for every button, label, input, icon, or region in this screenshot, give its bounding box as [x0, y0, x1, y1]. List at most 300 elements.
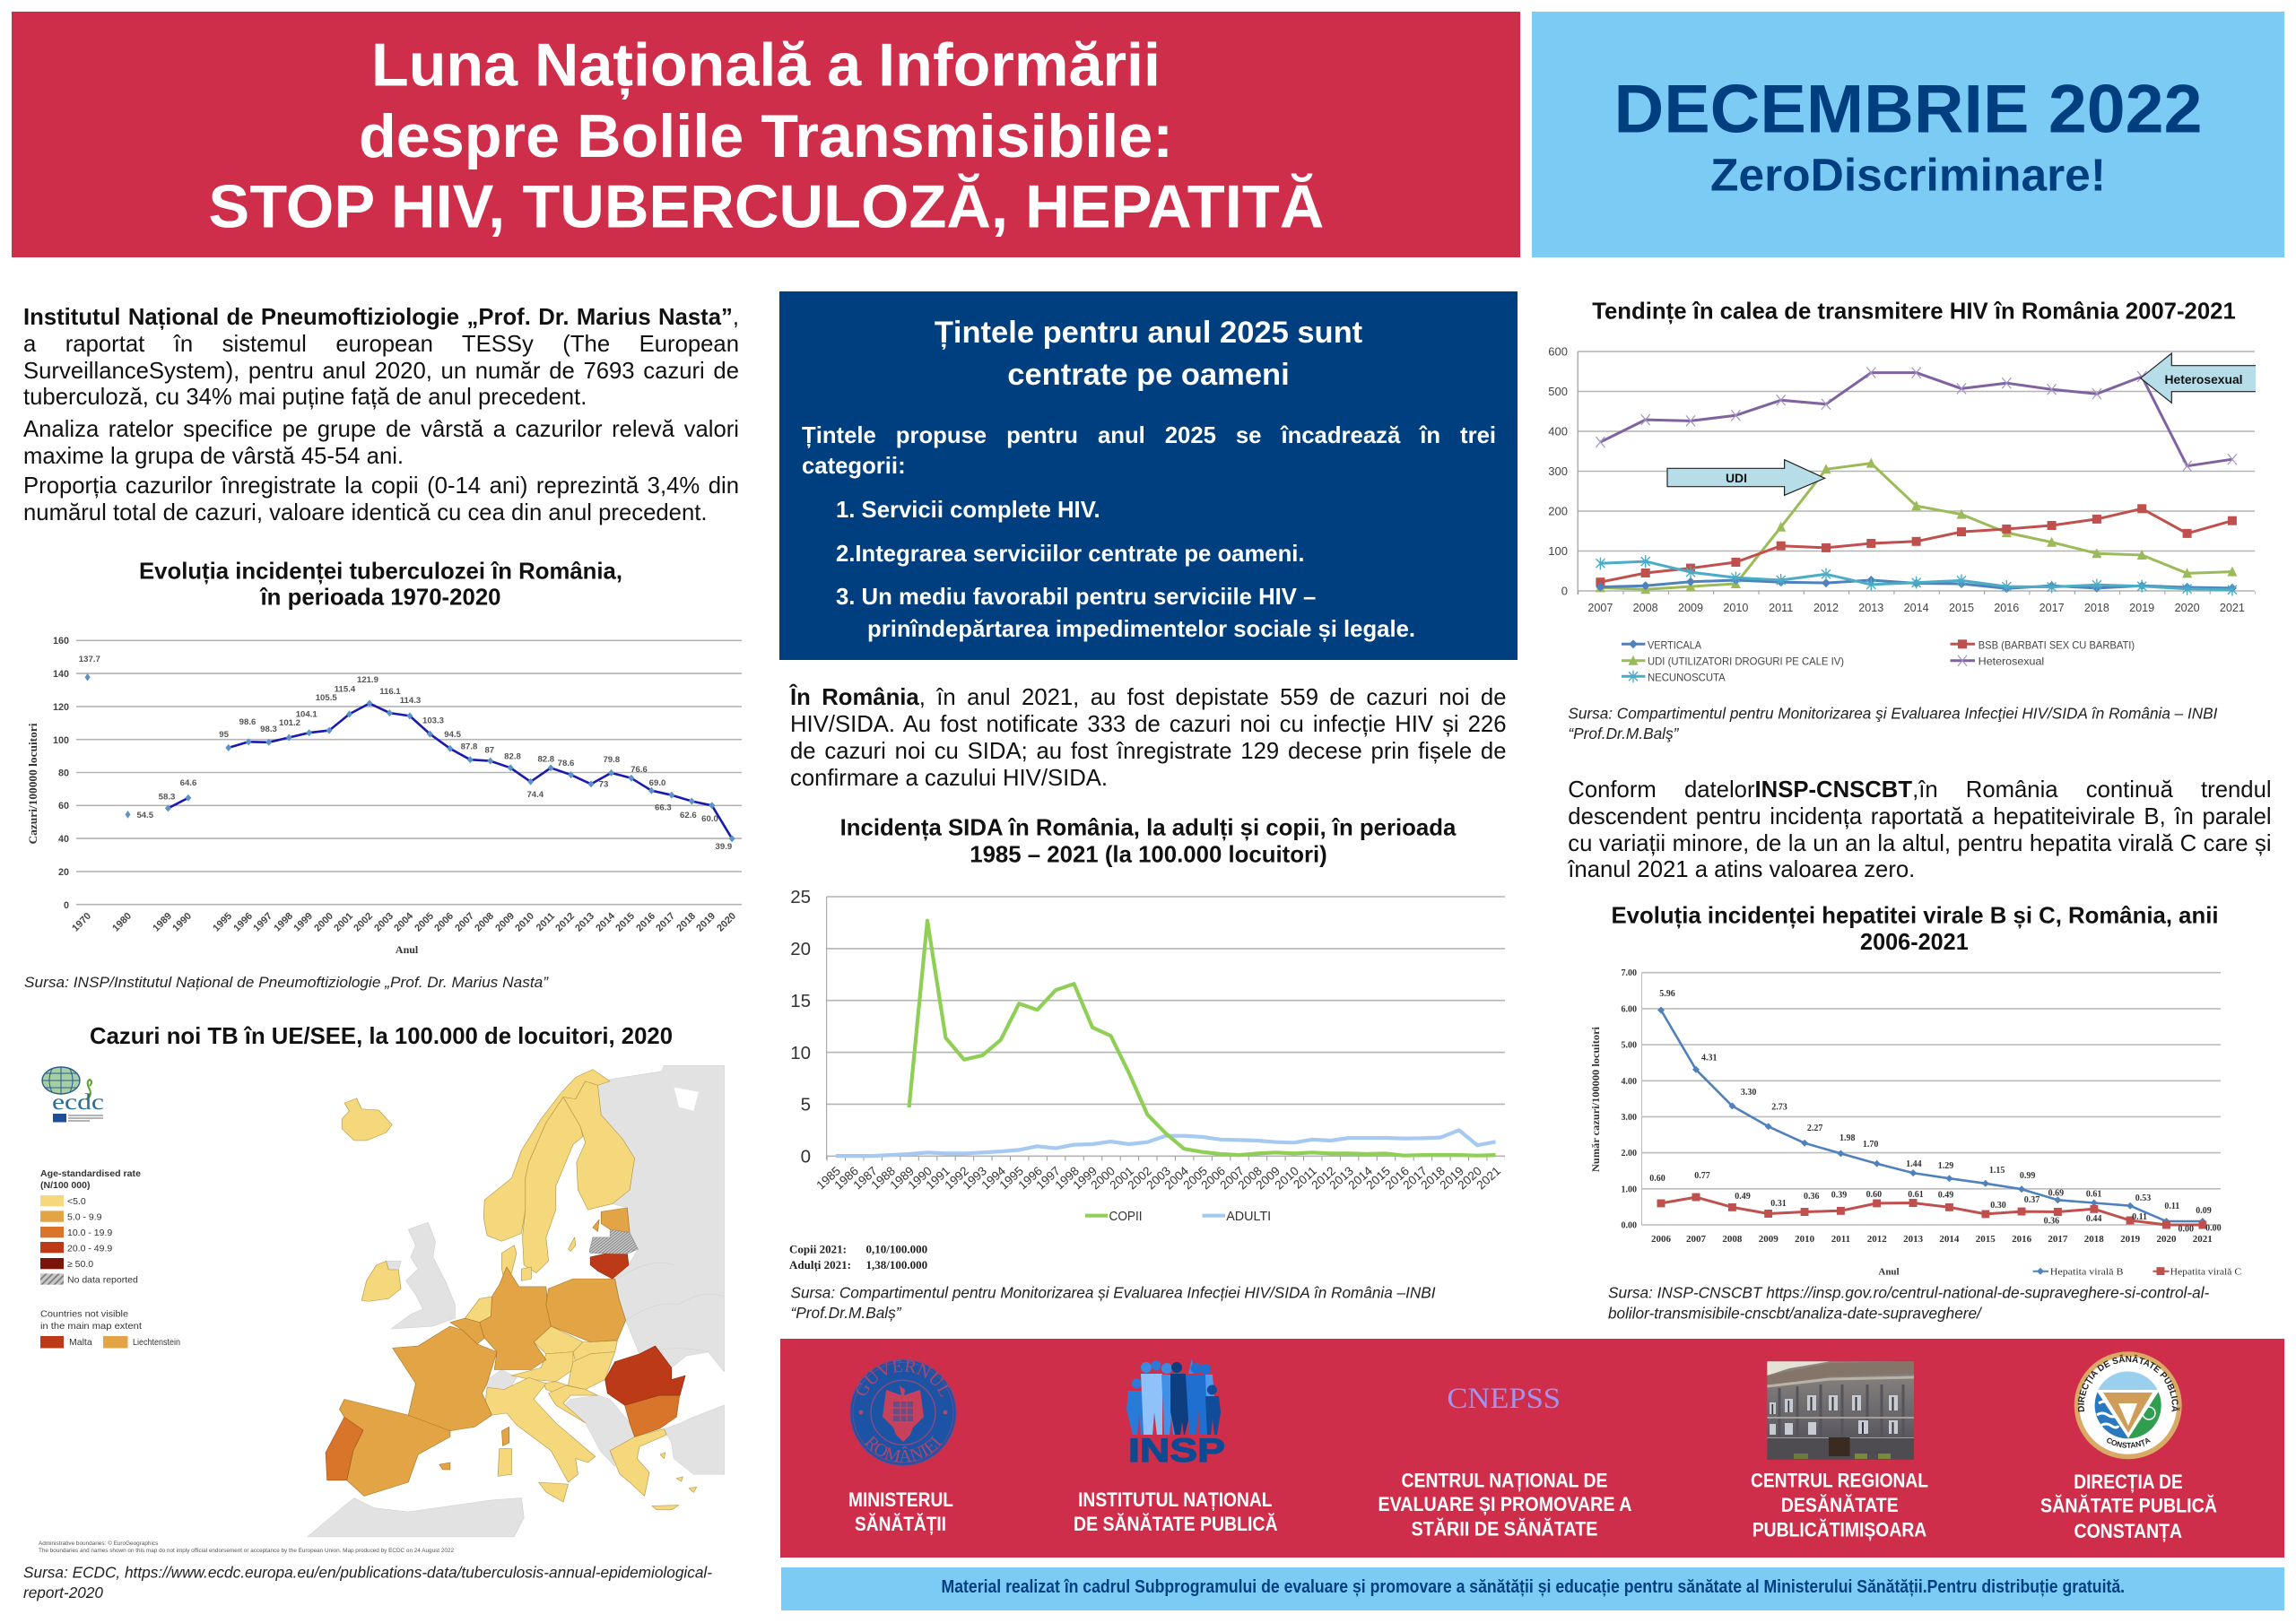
map legend: [40, 1168, 180, 1349]
data labels: 1.44: [1906, 1159, 1922, 1169]
data labels: 1.98: [1839, 1133, 1856, 1143]
x axis years: 2009: [1759, 1234, 1779, 1245]
label: Direcția de Sănătate Publică Constanța: [2040, 1471, 2217, 1542]
text block: age groups: [23, 416, 739, 468]
x axis years: 2018: [1418, 1164, 1448, 1192]
text block: HIV in Romania: de cazuri noi cu SIDA; au fost înregistrate 129 decese prin fișele de: [790, 739, 1507, 764]
series: hepatitis C: [1661, 1197, 2203, 1225]
title banner: [12, 12, 1520, 257]
x axis years: 2017: [2039, 602, 2065, 614]
x axis years: 2002: [352, 911, 375, 933]
source note: [791, 1284, 1436, 1322]
x axis years: 2012: [553, 911, 577, 933]
footer note strip: Material realizat în cadrul Subprogramului de evaluare și promovare a sănătății și educație pentru sănătate al Ministerului Sănătății.Pentru distribuție gratuită.: [942, 1577, 2125, 1597]
x axis years: 1980: [110, 911, 134, 933]
x axis years: 2006: [1651, 1234, 1672, 1245]
x axis years: 2015: [613, 911, 637, 933]
data labels: [1649, 989, 2222, 1234]
x axis years: 2018: [674, 911, 698, 933]
map legend: <5.0: [67, 1196, 86, 1207]
data labels: 0.49: [1735, 1192, 1751, 1202]
source note: Sursa: Compartimentul pentru Monitorizarea şi Evaluarea Infecţiei HIV/SIDA în România – INBI: [1568, 705, 2218, 723]
chart title: HIV: Tendințe în calea de transmitere HIV în România 2007-2021: [1592, 299, 2236, 325]
text block: HIV in Romania: [789, 683, 1507, 791]
label: Ministerul Sănătății: SĂNĂTĂȚII: [855, 1513, 946, 1535]
x axis years: 2002: [1125, 1164, 1154, 1192]
logo: ecdc: [42, 1067, 104, 1123]
chart legend: [2033, 1266, 2241, 1277]
intro line: Țintele propuse pentru anul 2025 se încadrează în trei: [802, 423, 1496, 448]
x axis years: 2017: [654, 911, 677, 933]
label: Ministerul Sănătății: MINISTERUL: [848, 1488, 953, 1511]
y axis values: [790, 887, 811, 1167]
x axis years: 2010: [1723, 602, 1748, 614]
y axis values: 20: [58, 867, 69, 878]
x axis years: [1651, 1234, 2213, 1245]
x axis years: 2006: [1198, 1164, 1228, 1192]
data labels: 87.8: [461, 742, 478, 751]
x axis years: 2020: [2175, 602, 2200, 614]
x axis years: 1995: [211, 911, 234, 933]
y axis values: 4.00: [1622, 1077, 1637, 1087]
title banner: Luna Națională a Informării: [371, 31, 1161, 100]
y axis values: 600: [1548, 344, 1568, 359]
logo: Government of Romania seal: GUVERNUL: [856, 1359, 949, 1397]
x axis years: 2009: [1253, 1164, 1283, 1192]
map disclaimer: [39, 1540, 454, 1554]
label: Direcția de Sănătate Publică Constanța: DIRECȚIA DE: [2074, 1471, 2183, 1493]
x axis years: 1990: [170, 911, 194, 933]
label: Direcția de Sănătate Publică Constanța: SĂNĂTATE PUBLICĂ: [2040, 1495, 2217, 1517]
y axis values: 7.00: [1622, 968, 1637, 978]
y axis values: 2.00: [1622, 1149, 1637, 1159]
x axis years: 2020: [2156, 1234, 2177, 1245]
x axis years: 1998: [1052, 1164, 1082, 1192]
x axis years: 2004: [392, 910, 416, 933]
map legend: Malta: [69, 1337, 92, 1348]
line chart: hepatitis B and C incidence: [1591, 903, 2241, 1323]
x axis years: 2004: [1161, 1164, 1191, 1192]
y axis values: 160: [53, 636, 69, 647]
source note: [1568, 705, 2218, 742]
chart title: AIDS: 1985 – 2021 (la 100.000 locuitori): [970, 843, 1327, 868]
source note: “Prof.Dr.M.Balș”: [791, 1304, 902, 1322]
chart title: tuberculosis: Evoluția incidenței tuberculozei în România,: [139, 560, 622, 585]
y axis values: 0: [1561, 585, 1568, 597]
data labels: 0.61: [1908, 1190, 1924, 1200]
text block: tuberculosis cases: Institutul Național de Pneumoftiziologie „Prof. Dr. Marius Nasta”,: [23, 305, 739, 330]
data labels: 121.9: [357, 675, 378, 685]
countries 5.0 to 9.9: [339, 1208, 630, 1496]
logo: INSP: INSP: [1128, 1432, 1225, 1469]
date banner: ZeroDiscriminare!: [1710, 149, 2106, 200]
x axis years: 1988: [868, 1164, 898, 1192]
y axis values: [53, 636, 69, 911]
arrow: UDI: [1667, 460, 1825, 495]
data labels: 82.8: [537, 755, 555, 764]
data labels: 95: [219, 730, 230, 740]
countries under 5 per 100 000: [342, 1070, 697, 1510]
chart legend: COPII: [1109, 1210, 1143, 1224]
y axis values: 5.00: [1622, 1040, 1637, 1051]
text block: hepatitis trend: descendent pentru incidența raportată a hepatiteivirale B, în paralel: [1568, 804, 2272, 829]
x axis years: 1990: [905, 1164, 935, 1192]
x axis years: 2011: [1831, 1234, 1850, 1245]
data labels: 39.9: [716, 842, 732, 852]
data labels: 0.49: [1938, 1191, 1953, 1200]
x axis years: 2014: [1939, 1234, 1960, 1245]
y axis values: 10: [790, 1043, 811, 1063]
data labels: 0.77: [1694, 1171, 1710, 1181]
arrow: UDI: UDI: [1726, 471, 1747, 485]
y axis values: 60: [58, 801, 69, 812]
data labels: 0.09: [2196, 1206, 2212, 1216]
chart legend: Heterosexual: [1979, 655, 2044, 668]
2021 rates note: Copii 2021:: [789, 1243, 847, 1256]
x axis years: 2007: [1686, 1234, 1706, 1245]
text block: hepatitis trend: [1568, 777, 2272, 882]
title banner: STOP HIV, TUBERCULOZĂ, HEPATITĂ: [208, 173, 1324, 241]
map legend: ≥ 50.0: [67, 1259, 93, 1270]
data labels: 98.3: [260, 725, 277, 734]
chart legend: VERTICALA: [1648, 638, 1701, 651]
x axis years: 2007: [1587, 602, 1613, 614]
x axis years: 1989: [887, 1164, 917, 1192]
x axis years: 1993: [960, 1164, 989, 1192]
text block: HIV in Romania: În România, în anul 2021, au fost depistate 559 de cazuri noi de: [790, 685, 1507, 710]
data labels: 1.29: [1938, 1161, 1953, 1171]
label: Centrul Regional: [1751, 1469, 1928, 1541]
x axis years: 2020: [715, 911, 738, 933]
y axis values: 500: [1548, 385, 1568, 398]
x axis years: 2008: [1633, 602, 1658, 614]
x axis title: Anul: [1878, 1266, 1900, 1277]
logo: Government of Romania seal: ROMÂNIEI: [865, 1435, 942, 1462]
map heading: Cazuri noi TB în UE/SEE, la 100.000 de locuitori, 2020: [90, 1024, 673, 1049]
y axis values: [1548, 344, 1568, 597]
data labels: 69.0: [649, 778, 665, 788]
text block: HIV in Romania: HIV/SIDA. Au fost notificate 333 de cazuri noi cu infecție HIV și 226: [790, 712, 1507, 737]
series: verticala: [1600, 580, 2232, 588]
countries 10.0 to 19.9: [326, 1393, 680, 1480]
x axis years: 2016: [634, 911, 657, 933]
data labels: 103.3: [422, 716, 444, 726]
logo: INSP: [1126, 1358, 1225, 1469]
x axis years: 2007: [1217, 1164, 1247, 1192]
label: Institutul Național de Sănătate Publică: [1074, 1488, 1278, 1535]
data labels: 60.0: [701, 814, 718, 824]
x axis years: 1995: [996, 1164, 1026, 1192]
x axis years: 2014: [1904, 602, 1929, 614]
x axis years: 2016: [1994, 602, 2019, 614]
text block: tuberculosis cases: [23, 305, 739, 410]
series: incidence line: [168, 703, 732, 838]
data labels: 0.36: [1804, 1192, 1820, 1202]
x axis years: 2000: [312, 911, 335, 933]
x axis years: 1997: [1033, 1164, 1063, 1192]
map legend: 10.0 - 19.9: [67, 1228, 112, 1238]
data labels: 0.00: [2178, 1225, 2194, 1234]
y axis values: 400: [1548, 425, 1568, 438]
data labels: 0.39: [1831, 1191, 1847, 1200]
data labels: 0.00: [2205, 1223, 2222, 1234]
x axis years: 2003: [372, 911, 396, 933]
series: necunoscuta: [1600, 561, 2232, 590]
arrow: Heterosexual: Heterosexual: [2165, 372, 2242, 386]
2021 rates note: [789, 1243, 927, 1272]
x axis years: 2009: [1678, 602, 1703, 614]
y axis values: 0: [801, 1146, 811, 1167]
x axis years: 2011: [535, 911, 557, 933]
chart legend: Hepatita virală C: [2170, 1266, 2241, 1277]
x axis years: 2001: [332, 911, 355, 933]
map legend: Countries not visible: [40, 1309, 128, 1320]
y axis title: Număr cazuri/100000 locuitori: [1591, 1026, 1602, 1172]
series: hepatitis B: [1661, 1010, 2203, 1221]
x axis years: 1999: [291, 911, 315, 933]
y axis values: [1622, 968, 1637, 1230]
data labels: 54.5: [136, 811, 154, 820]
panel heading: Țintele pentru anul 2025 sunt: [935, 316, 1362, 350]
data labels: [79, 655, 732, 852]
x axis years: 2012: [1813, 602, 1839, 614]
x axis years: 1998: [272, 911, 295, 933]
text block: children proportion: numărul total de cazuri, valoare identică cu cea din anul precedent.: [23, 500, 708, 525]
logo: Direcția de Sănătate Publică Constanța seal: DIRECȚIA DE SĂNĂTATE PUBLICĂ: [2077, 1354, 2180, 1411]
y axis values: 25: [790, 887, 811, 907]
y axis values: 100: [53, 735, 69, 746]
x axis years: 2008: [1722, 1234, 1743, 1245]
data labels: 78.6: [558, 759, 574, 768]
line chart: tuberculosis incidence 1970-2020: [24, 560, 742, 991]
date banner: [1532, 12, 2284, 257]
x axis years: 2019: [2120, 1234, 2141, 1245]
source note: Sursa: INSP-CNSCBT https://insp.gov.ro/centrul-national-de-supraveghere-si-control-al-: [1608, 1284, 2209, 1302]
no data: Latvia: [589, 1229, 638, 1254]
logo text: CNEPSS: CNEPSS: [1447, 1383, 1561, 1415]
chart legend: UDI (UTILIZATORI DROGURI PE CALE IV): [1648, 655, 1844, 668]
x axis years: 2001: [1107, 1164, 1136, 1192]
data labels: 58.3: [159, 793, 175, 802]
data labels: 79.8: [603, 755, 621, 765]
y axis values: 6.00: [1622, 1004, 1637, 1015]
x axis years: 2011: [1769, 602, 1793, 614]
date banner: DECEMBRIE 2022: [1614, 71, 2203, 147]
series: heterosexual: [1600, 373, 2232, 466]
chart title: hepatitis: 2006-2021: [1860, 930, 1969, 955]
x axis years: 2012: [1867, 1234, 1887, 1245]
data labels: 82.8: [504, 751, 521, 762]
data labels: 98.6: [239, 717, 256, 727]
series: children: [909, 921, 1496, 1156]
data labels: 62.6: [680, 811, 697, 820]
data labels: 0.44: [2086, 1214, 2101, 1224]
data labels: 115.4: [335, 685, 356, 694]
x axis years: 2017: [1400, 1164, 1430, 1192]
map legend: No data reported: [67, 1275, 138, 1286]
map disclaimer: Administrative boundaries: © EuroGeographics: [39, 1540, 158, 1547]
data labels: 64.6: [180, 778, 196, 788]
text block: age groups: Analiza ratelor specifice pe grupe de vârstă a cazurilor relevă valori: [23, 416, 739, 441]
x axis years: 2016: [2012, 1234, 2032, 1245]
intro line: [802, 423, 1496, 479]
data labels: 0.36: [2044, 1216, 2059, 1227]
data labels: 1.70: [1863, 1140, 1878, 1150]
y axis values: 140: [53, 669, 69, 680]
x axis years: 2019: [1437, 1164, 1466, 1192]
logo: Government of Romania seal: [849, 1359, 957, 1466]
data labels: 0.60: [1649, 1174, 1665, 1184]
x axis years: 2005: [1180, 1164, 1210, 1192]
map legend: Age-standardised rate: [40, 1168, 141, 1179]
data labels: 0.37: [2024, 1195, 2039, 1205]
source note: Sursa: INSP/Institutul Național de Pneumoftiziologie „Prof. Dr. Marius Nasta”: [24, 974, 549, 991]
y axis values: 0.00: [1622, 1221, 1637, 1230]
x axis years: 1996: [231, 911, 255, 933]
logo: Direcția de Sănătate Publică Constanța seal: CONSTANȚA: [2107, 1438, 2151, 1448]
title banner: despre Bolile Transmisibile:: [359, 102, 1173, 170]
label: Direcția de Sănătate Publică Constanța: CONSTANȚA: [2074, 1520, 2182, 1542]
chart legend: ADULTI: [1226, 1210, 1271, 1224]
data labels: 76.6: [631, 765, 648, 775]
list item 1: 1. Servicii complete HIV.: [836, 497, 1100, 522]
data labels: 116.1: [379, 687, 401, 697]
x axis years: 1970: [70, 911, 93, 933]
source note: report-2020: [23, 1584, 103, 1601]
label: Centrul Național: STĂRII DE SĂNĂTATE: [1412, 1517, 1598, 1540]
photo: regional centre building: [1767, 1361, 1914, 1460]
data labels: 3.30: [1741, 1088, 1756, 1098]
chart legend: NECUNOSCUTA: [1648, 671, 1726, 683]
data labels: 87: [484, 746, 494, 755]
panel: 2025 targets: [779, 291, 1518, 660]
map legend: (N/100 000): [40, 1180, 90, 1191]
x axis years: 2010: [513, 911, 536, 933]
label: Centrul Regional: CENTRUL REGIONAL: [1751, 1469, 1928, 1491]
x axis years: 2008: [473, 911, 496, 933]
map: Europe countries: [308, 1065, 724, 1537]
data labels: 2.27: [1807, 1124, 1822, 1133]
x axis years: 2015: [1976, 1234, 1996, 1245]
x axis years: 1997: [251, 911, 274, 933]
series: UDI: [1600, 464, 2232, 589]
list item 2: 2.Integrarea serviciilor centrate pe oameni.: [836, 542, 1305, 567]
x axis years: 2010: [1795, 1234, 1815, 1245]
chart title: AIDS: Incidența SIDA în România, la adulți și copii, în perioada: [840, 816, 1457, 841]
map disclaimer: The boundaries and names shown on this map do not imply official endorsement or acceptance by the European Union. Map produced by ECDC on 24 August 2022: [39, 1548, 454, 1554]
label: Centrul Regional: PUBLICĂTIMIȘOARA: [1752, 1518, 1926, 1541]
panel: partner institutions: [780, 1339, 2284, 1558]
label: Centrul Regional: DESĂNĂTATE: [1781, 1494, 1899, 1516]
text block: tuberculosis cases: SurveillanceSystem), pentru anul 2020, un număr de 7693 cazuri de: [23, 359, 739, 384]
x axis years: 2008: [1235, 1164, 1265, 1192]
data labels: 4.31: [1701, 1053, 1717, 1063]
source note: bolilor-transmisibile-cnscbt/analiza-date-supraveghere/: [1608, 1305, 1983, 1323]
x axis years: 2019: [694, 911, 718, 933]
y axis values: 1.00: [1622, 1185, 1637, 1194]
map legend: 20.0 - 49.9: [67, 1243, 112, 1254]
2021 rates note: 0,10/100.000: [866, 1243, 927, 1256]
x axis years: 2007: [453, 911, 476, 933]
chart legend: BSB (BARBATI SEX CU BARBATI): [1979, 638, 2135, 651]
data labels: 2.73: [1771, 1103, 1787, 1112]
source note: [1608, 1284, 2209, 1323]
x axis years: 2015: [1949, 602, 1974, 614]
label: Centrul Național: EVALUARE ȘI PROMOVARE A: [1378, 1493, 1632, 1515]
text block: hepatitis trend: înanul 2021 a atins valoarea zero.: [1568, 857, 1915, 882]
x axis years: 1985: [813, 1164, 843, 1192]
data labels: 0.99: [2020, 1171, 2035, 1181]
x axis years: 2021: [2220, 602, 2245, 614]
x axis years: [1587, 602, 2245, 614]
footer note strip: [781, 1567, 2284, 1610]
data labels: 73: [599, 780, 608, 789]
source note: [23, 1564, 712, 1601]
x axis years: 2016: [1382, 1164, 1412, 1192]
text block: age groups: maxime la grupa de vârstă 45-54 ani.: [23, 443, 404, 468]
label: Centrul Național: [1378, 1469, 1632, 1540]
2021 rates note: 1,38/100.000: [866, 1258, 927, 1271]
text block: HIV in Romania: confirmare a cazului HIV/SIDA.: [790, 766, 1108, 791]
source note: Sursa: ECDC, https://www.ecdc.europa.eu/en/publications-data/tuberculosis-annual-epidemiological-: [23, 1564, 712, 1582]
x axis years: 2018: [2084, 1234, 2104, 1245]
arrow: Heterosexual: [2141, 353, 2256, 403]
y axis values: 300: [1548, 464, 1568, 478]
data labels: 0.60: [1866, 1190, 1882, 1200]
line chart: HIV transmission routes 2007-2021: [1548, 299, 2256, 742]
x axis years: 2011: [1291, 1164, 1319, 1192]
data labels: 137.7: [79, 655, 100, 664]
chart title: AIDS: [840, 816, 1457, 868]
non-reporting grey countries: [308, 1065, 724, 1537]
x axis years: 1991: [923, 1164, 952, 1192]
x axis years: 2018: [2084, 602, 2109, 614]
x axis years: 1989: [151, 911, 174, 933]
source note: Sursa: Compartimentul pentru Monitorizarea și Evaluarea Infecției HIV/SIDA în România –INBI: [791, 1284, 1436, 1302]
x axis years: 2019: [2129, 602, 2154, 614]
series: adults: [836, 1130, 1496, 1156]
x axis years: 1994: [978, 1164, 1008, 1192]
chart title: tuberculosis: în perioada 1970-2020: [258, 585, 500, 610]
y axis values: 100: [1548, 544, 1568, 558]
x axis title: Anul: [396, 943, 419, 956]
y axis values: 120: [53, 702, 69, 713]
x axis years: 2014: [1345, 1164, 1375, 1192]
y axis values: 20: [790, 939, 811, 959]
text block: hepatitis trend: cu variații minore, de la un an la altul, pentru hepatita virală C care și: [1568, 831, 2272, 856]
x axis years: 1987: [850, 1164, 880, 1192]
data labels: 5.96: [1659, 989, 1675, 999]
data labels: 0.53: [2135, 1193, 2151, 1203]
source note: “Prof.Dr.M.Balş”: [1568, 725, 1680, 742]
x axis years: [813, 1164, 1503, 1192]
chart legend: [1622, 638, 2135, 683]
chart title: tuberculosis: [139, 560, 622, 610]
data labels: 74.4: [526, 790, 544, 800]
data labels: 0.11: [2132, 1212, 2147, 1222]
x axis years: 2013: [1326, 1164, 1356, 1192]
x axis years: 2013: [573, 911, 596, 933]
list item 3: [836, 585, 1415, 642]
x axis years: 2012: [1309, 1164, 1338, 1192]
x axis years: 2017: [2048, 1234, 2068, 1245]
y axis title: Cazuri/100000 locuitori: [27, 723, 39, 845]
label: Institutul Național de Sănătate Publică: INSTITUTUL NAȚIONAL: [1078, 1488, 1273, 1511]
x axis years: 2014: [594, 910, 618, 933]
x axis years: 2010: [1272, 1164, 1301, 1192]
y axis values: 3.00: [1622, 1113, 1637, 1123]
x axis years: 2006: [432, 911, 456, 933]
